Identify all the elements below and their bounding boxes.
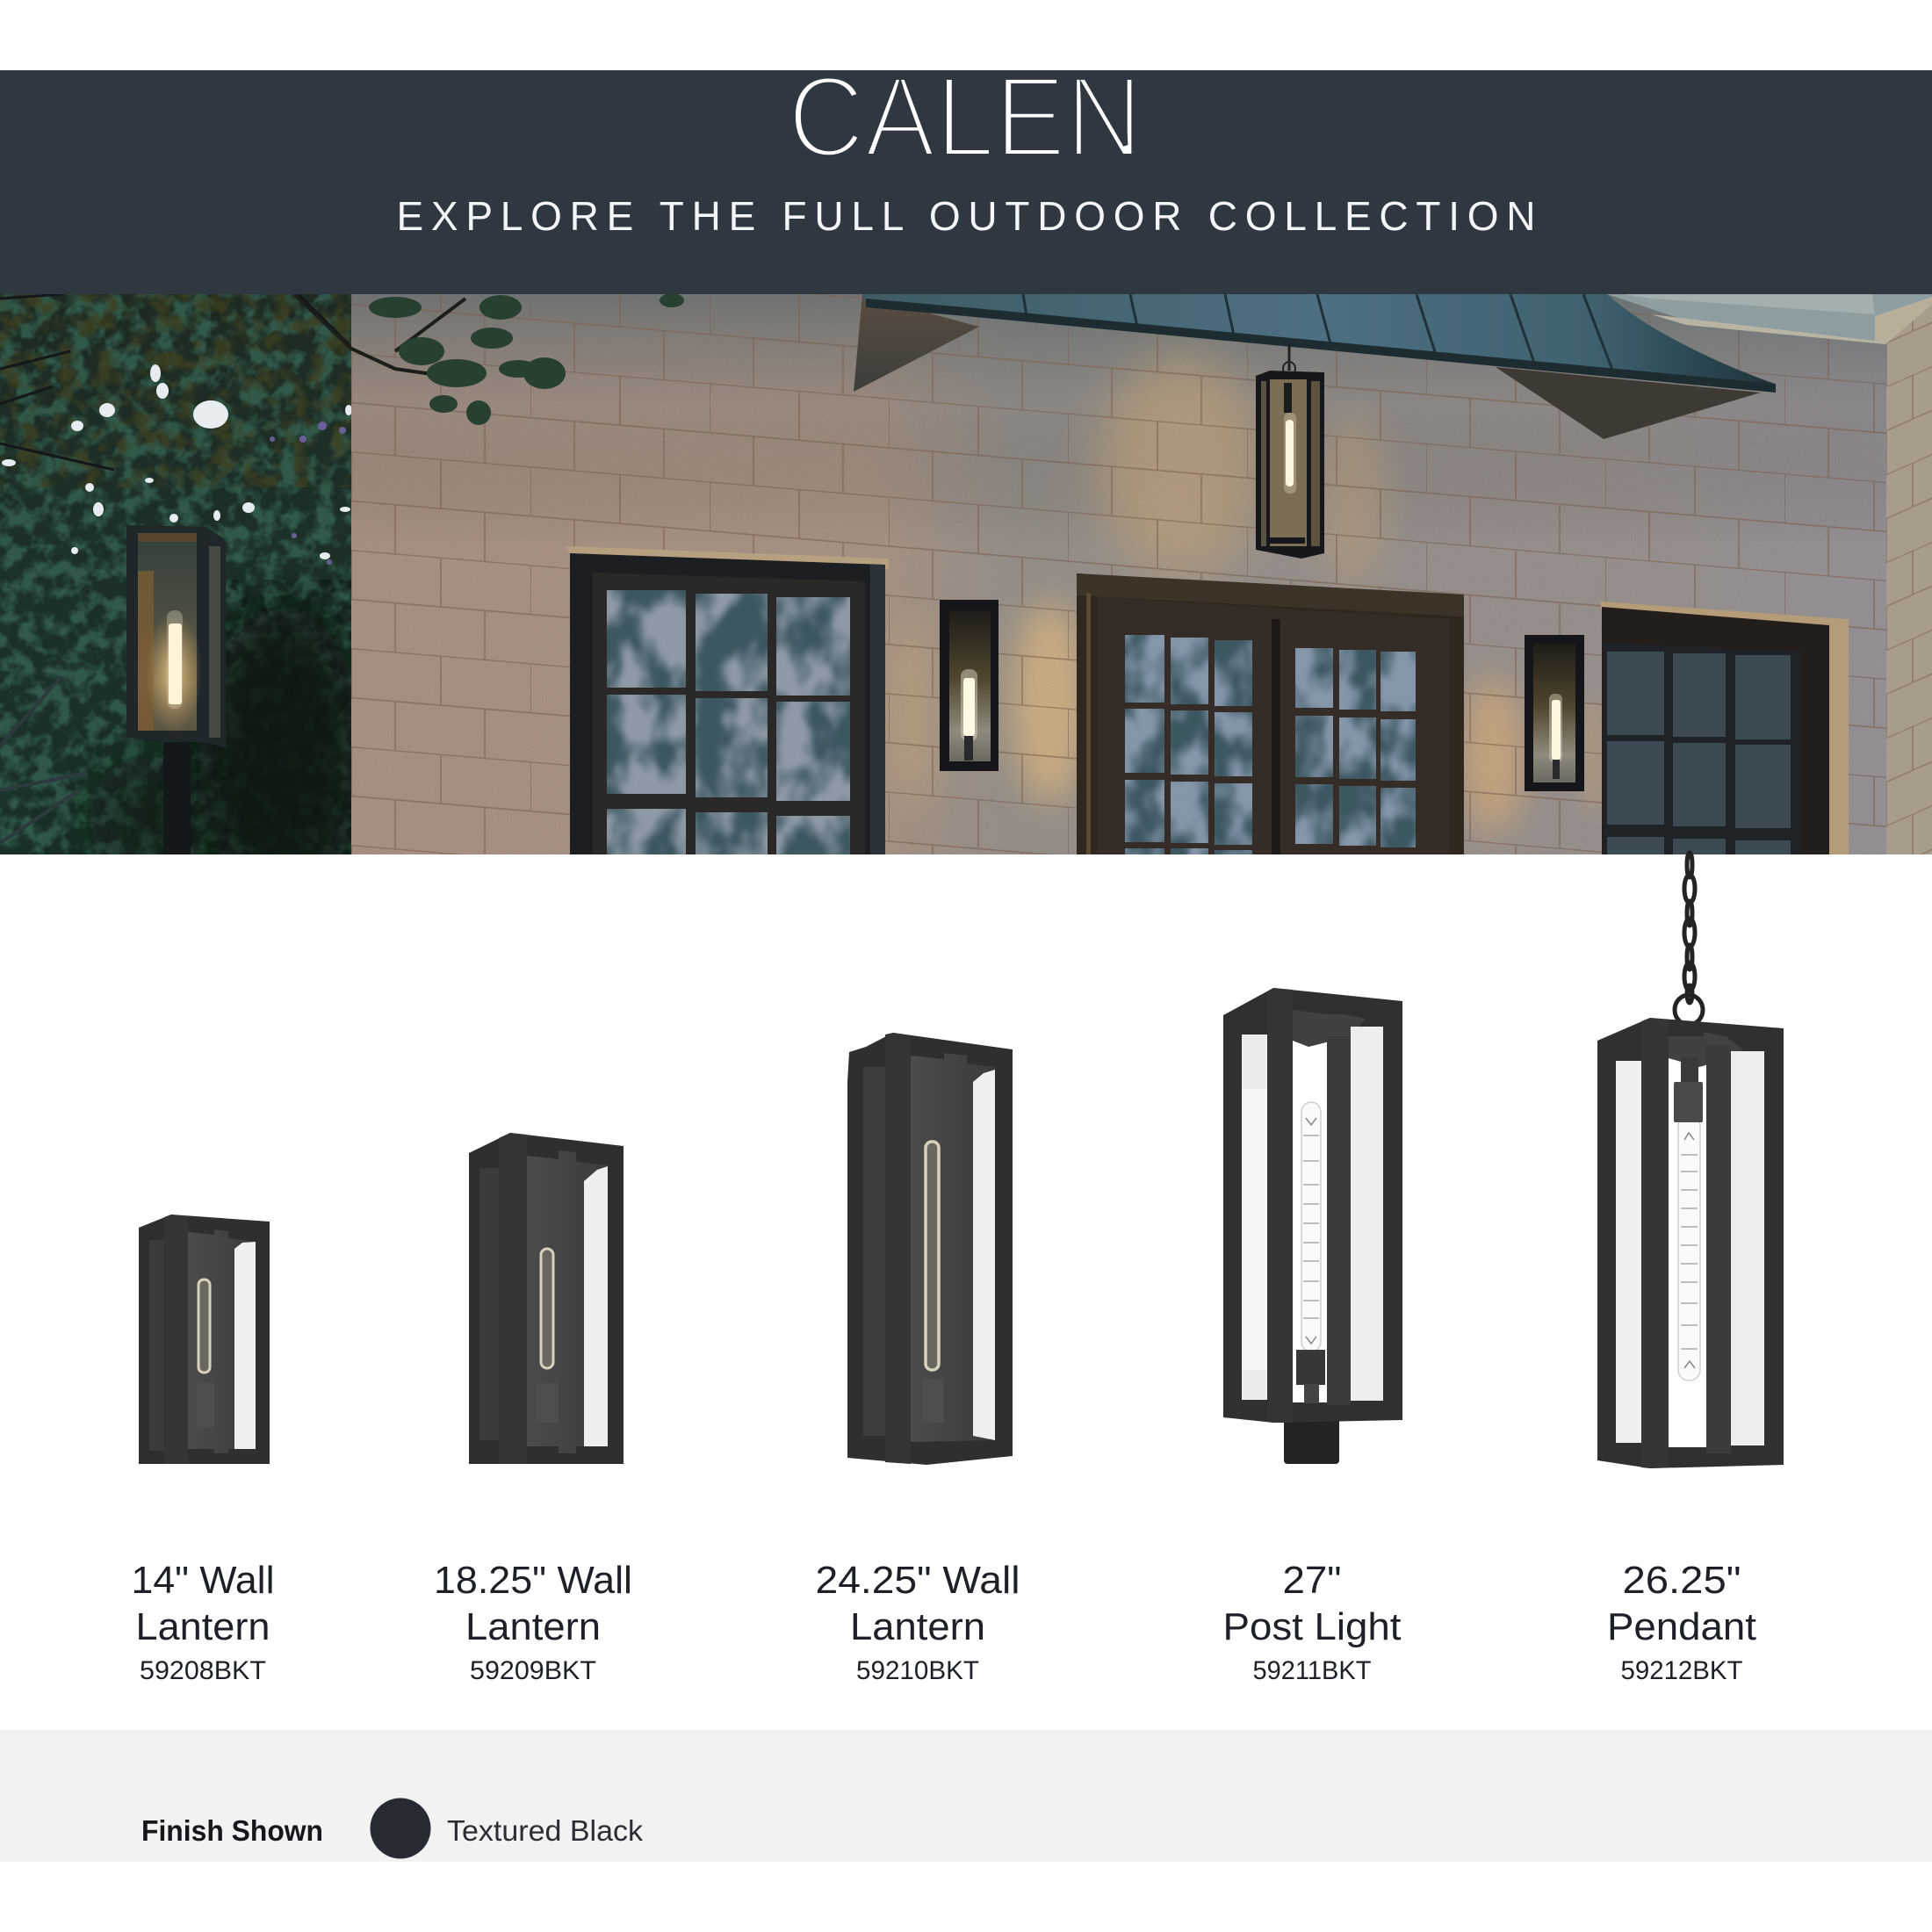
labels for 18.25 inch wall lantern	[434, 1559, 632, 1685]
labels for 24.25 inch wall lantern: 59210BKT	[856, 1656, 979, 1685]
post base	[1284, 1414, 1339, 1464]
labels for 14 inch wall lantern: 14" Wall	[132, 1559, 274, 1602]
hanging pendant in photo	[1256, 344, 1324, 559]
labels for 26.25 inch pendant: Pendant	[1607, 1605, 1756, 1648]
labels for 27 inch post light: Post Light	[1222, 1605, 1402, 1648]
labels for 24.25 inch wall lantern: Lantern	[850, 1605, 985, 1648]
labels for 27 inch post light: 59211BKT	[1252, 1656, 1372, 1685]
labels for 18.25 inch wall lantern: 18.25" Wall	[434, 1559, 632, 1602]
lifestyle photo of house at dusk	[0, 293, 1932, 905]
product: 26.25 inch pendant	[1597, 853, 1784, 1468]
product: 24.25 inch wall lantern	[847, 1033, 1013, 1465]
labels for 24.25 inch wall lantern: 24.25" Wall	[815, 1559, 1020, 1602]
window left	[566, 546, 889, 861]
finish swatch	[371, 1799, 430, 1858]
header banner	[0, 52, 1932, 294]
wall lantern right in photo	[1525, 635, 1584, 791]
finish band	[0, 1730, 1932, 1862]
labels for 18.25 inch wall lantern: 59209BKT	[470, 1656, 596, 1685]
product: 18.25 inch wall lantern	[469, 1133, 624, 1464]
finish label: Finish Shown	[141, 1814, 323, 1847]
labels for 27 inch post light	[1222, 1559, 1402, 1685]
labels for 14 inch wall lantern: Lantern	[135, 1605, 270, 1648]
bulb	[1678, 1115, 1700, 1381]
wall	[351, 294, 1932, 854]
trees	[0, 294, 351, 854]
overhanging branch	[294, 293, 684, 425]
labels for 26.25 inch pendant: 59212BKT	[1621, 1656, 1742, 1685]
fascia and soffit top right	[1607, 294, 1932, 344]
chain	[1675, 853, 1703, 1025]
socket	[1296, 1350, 1325, 1385]
wall lantern left in photo	[940, 600, 998, 771]
socket	[1681, 1057, 1698, 1084]
labels for 24.25 inch wall lantern	[815, 1559, 1020, 1685]
metal awning	[854, 294, 1776, 439]
window right	[1601, 602, 1849, 854]
french doors	[1077, 573, 1464, 861]
labels for 26.25 inch pendant: 26.25"	[1623, 1559, 1741, 1602]
product: 27 inch post light	[1223, 988, 1402, 1464]
finish name: Textured Black	[447, 1814, 644, 1847]
bulb	[1301, 1102, 1321, 1352]
labels for 27 inch post light: 27"	[1282, 1559, 1342, 1602]
labels for 18.25 inch wall lantern: Lantern	[465, 1605, 601, 1648]
labels for 14 inch wall lantern	[132, 1559, 274, 1685]
title: CALEN	[788, 52, 1143, 181]
labels for 26.25 inch pendant	[1607, 1559, 1756, 1685]
labels for 14 inch wall lantern: 59208BKT	[140, 1656, 266, 1685]
subtitle: EXPLORE THE FULL OUTDOOR COLLECTION	[397, 193, 1535, 239]
post lantern in photo	[126, 525, 226, 854]
product: 14 inch wall lantern	[139, 1215, 270, 1464]
